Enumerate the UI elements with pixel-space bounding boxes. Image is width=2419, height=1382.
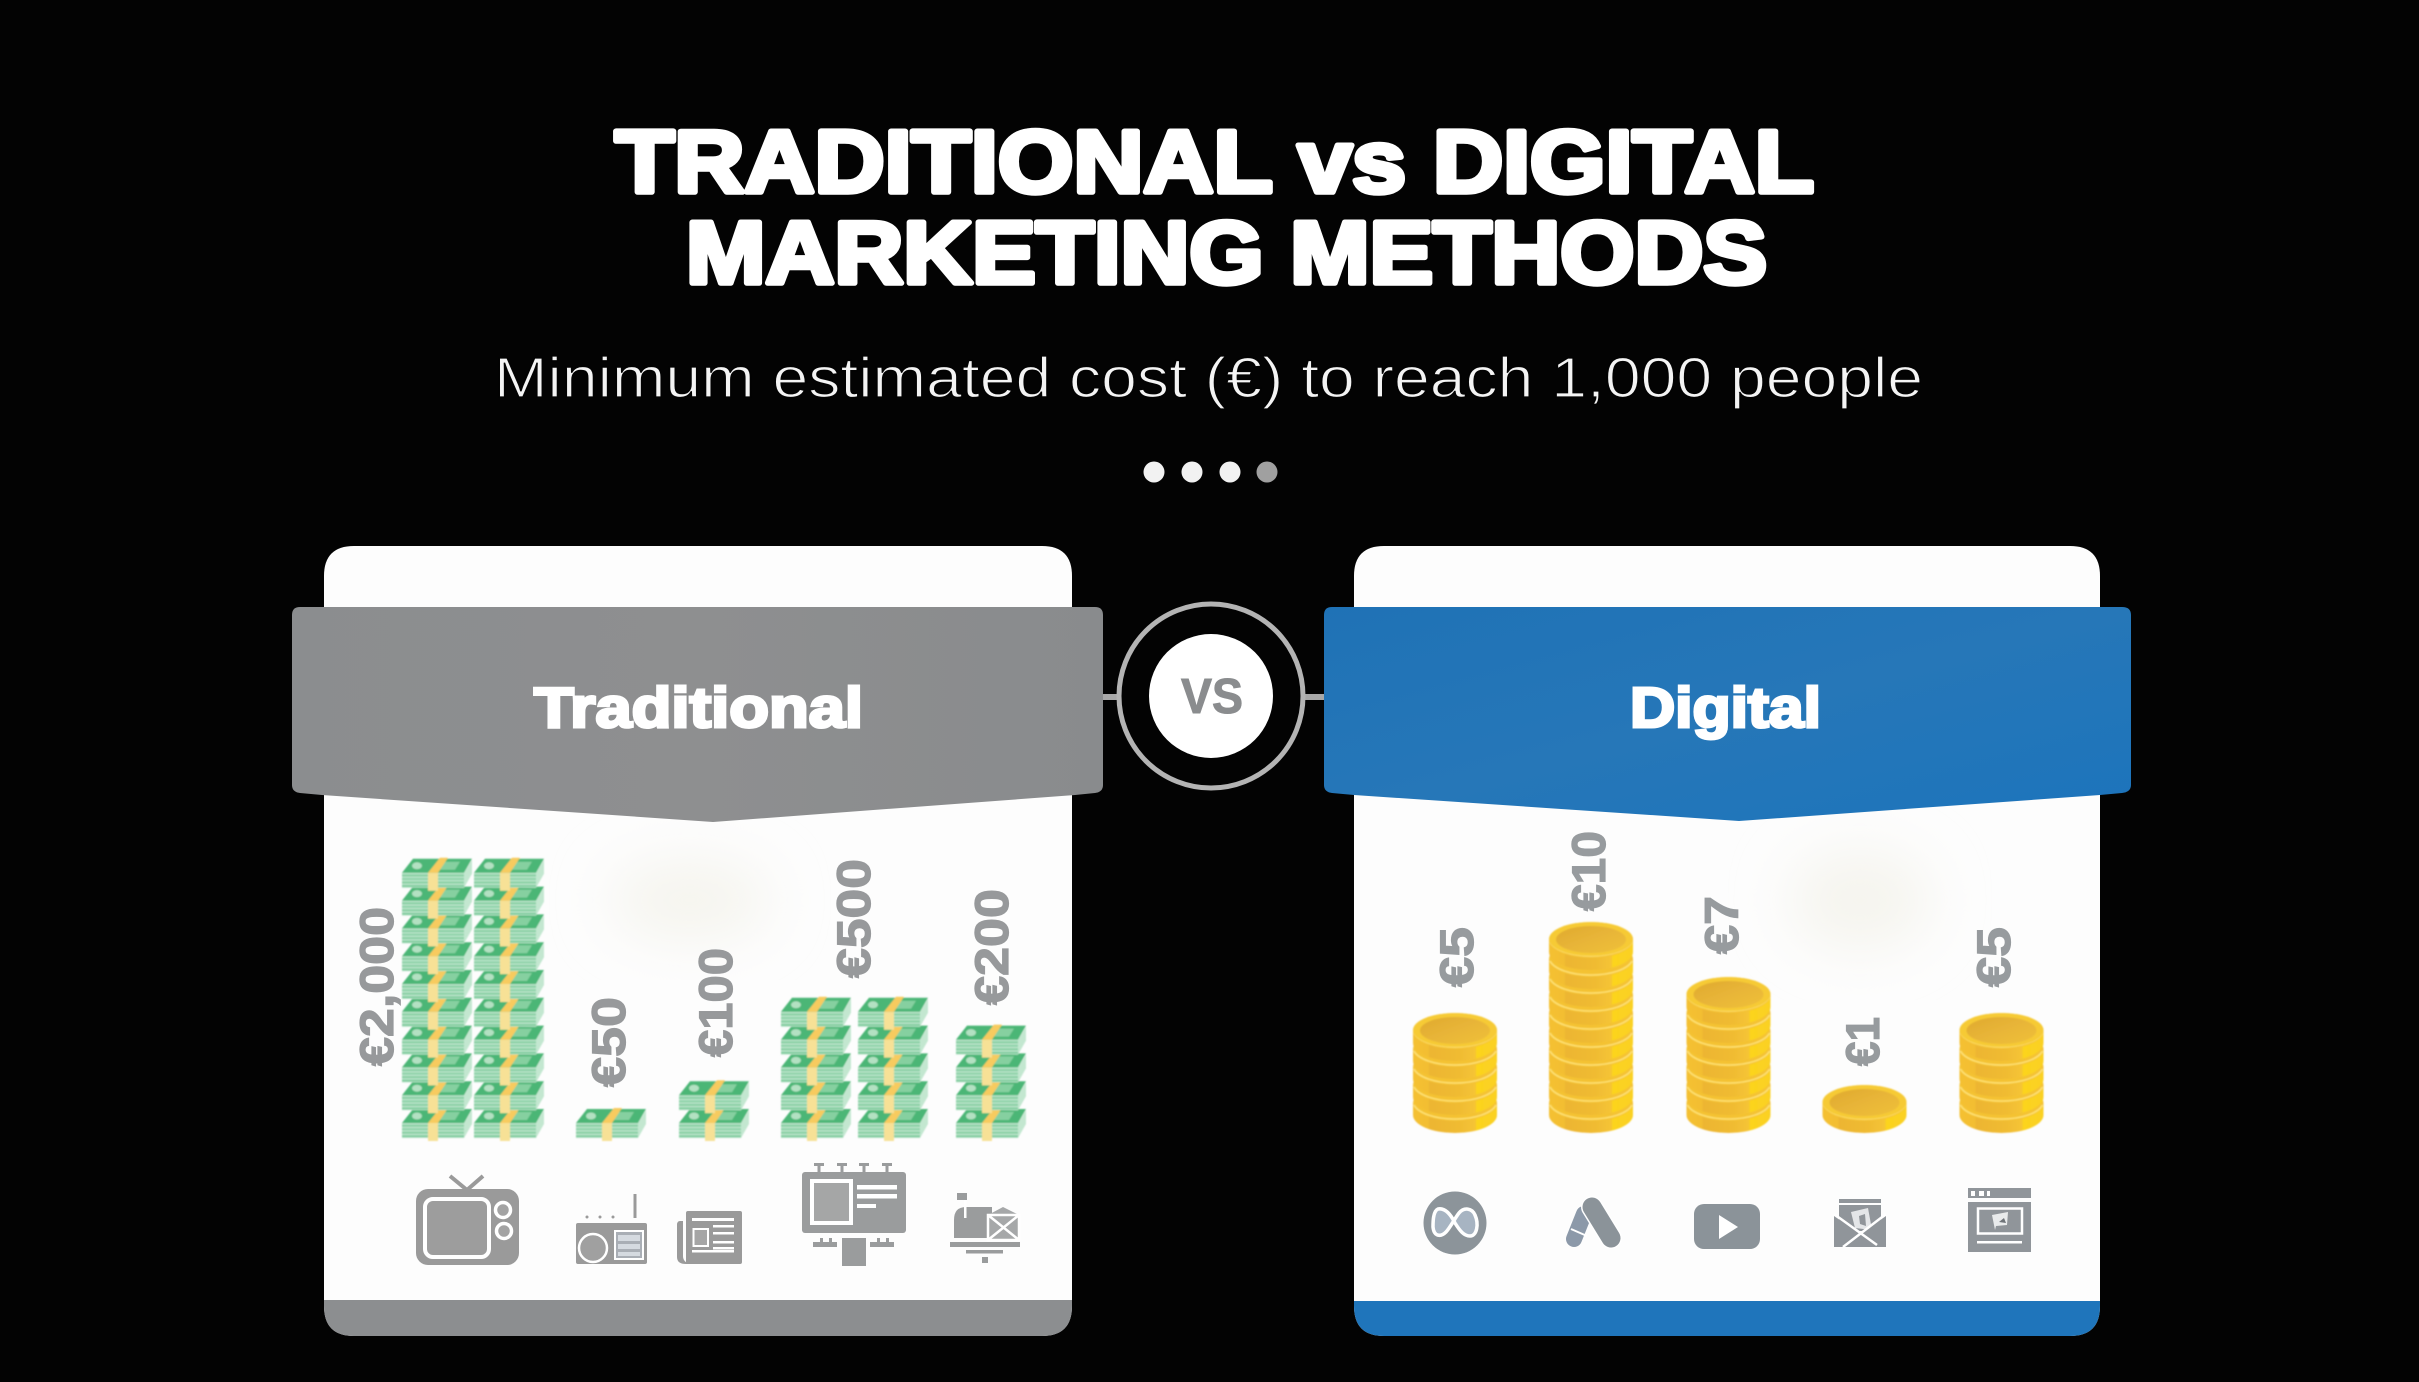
icon: mailbox — [950, 1193, 1020, 1263]
background haze — [1790, 850, 1930, 950]
coin stack: email 1 — [1822, 1085, 1906, 1133]
footer bar — [324, 1300, 1072, 1336]
panel: digital — [1324, 546, 2131, 1336]
money stack: radio 50 — [576, 1108, 646, 1141]
background haze — [610, 860, 770, 940]
icon: web page — [1968, 1188, 2031, 1252]
icon: billboard — [802, 1163, 906, 1266]
value labels: €100 — [689, 948, 742, 1057]
icon: Google Ads — [1571, 1207, 1611, 1239]
icon: newspaper — [677, 1211, 742, 1264]
title: TRADITIONAL vs DIGITAL — [615, 112, 1814, 211]
value labels: €7 — [1695, 896, 1748, 954]
subtitle: Minimum estimated cost (€) to reach 1,000 people — [494, 346, 1923, 410]
footer bar — [1354, 1301, 2100, 1336]
card body — [1354, 546, 2100, 1336]
connector: left — [1103, 694, 1120, 700]
banner — [1324, 607, 2131, 821]
coin stack: Google Ads 10 — [1549, 922, 1633, 1133]
icon: Meta — [1424, 1192, 1486, 1254]
coin stack: Meta 5 — [1413, 1013, 1497, 1133]
connector: right — [1301, 694, 1325, 700]
money stack: newspaper 100 — [679, 1080, 749, 1141]
value labels: €10 — [1562, 831, 1615, 911]
title: MARKETING METHODS — [686, 203, 1767, 302]
value labels: €200 — [965, 889, 1018, 1005]
value labels — [350, 859, 1018, 1087]
pagination dots — [1144, 462, 1278, 482]
coin stack: web 5 — [1960, 1013, 2044, 1133]
value labels: €5 — [1967, 927, 2020, 987]
value labels: €1 — [1836, 1017, 1889, 1066]
money stack: billboard 500 — [781, 997, 928, 1141]
coin stack: YouTube 7 — [1686, 977, 1770, 1133]
icon: email — [1834, 1199, 1886, 1247]
value labels: €2,000 — [350, 907, 403, 1066]
value labels: €50 — [582, 997, 635, 1087]
banner heading: Traditional — [534, 676, 863, 740]
banner — [292, 607, 1103, 822]
value labels — [1430, 831, 2020, 1066]
icon: television — [416, 1176, 519, 1265]
panel: traditional — [292, 546, 1103, 1336]
banner heading: Digital — [1630, 676, 1821, 740]
title — [615, 112, 1814, 302]
value labels: €500 — [827, 859, 880, 978]
vs badge — [1119, 604, 1303, 788]
icon: radio — [576, 1194, 647, 1264]
vs badge: VS — [1181, 670, 1243, 724]
money stack: TV 2000 — [402, 858, 544, 1141]
card body — [324, 546, 1072, 1336]
money stack: direct mail 200 — [956, 1025, 1026, 1141]
value labels: €5 — [1430, 927, 1483, 987]
icon: YouTube — [1694, 1204, 1760, 1249]
